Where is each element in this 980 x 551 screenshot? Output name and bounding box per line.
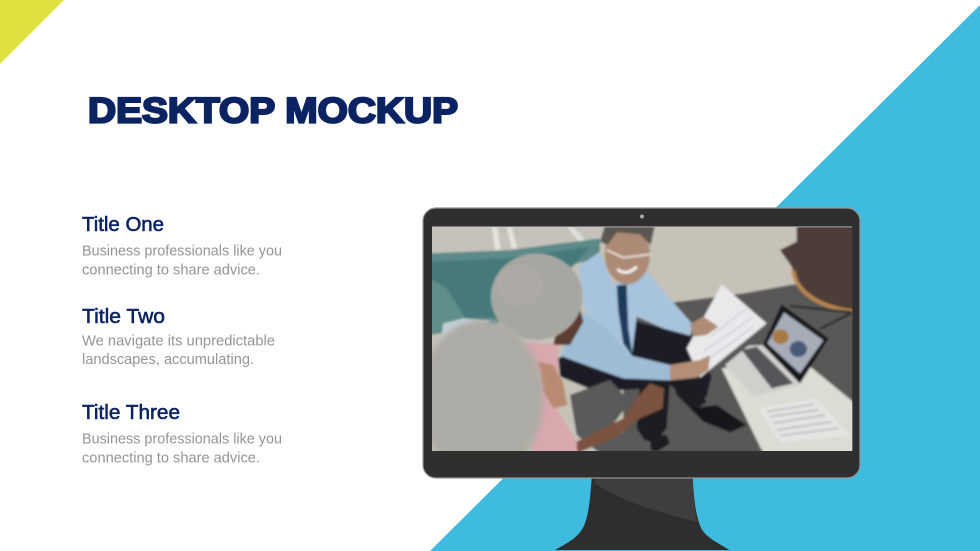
body: title three: Business professionals like you [82, 430, 282, 448]
body: title two [82, 332, 275, 368]
desktop monitor mockup [420, 208, 860, 550]
text block: title three [82, 402, 282, 466]
body: title one: connecting to share advice. [82, 262, 260, 278]
heading: title three: Title Three [82, 402, 180, 424]
body: title one [82, 242, 282, 278]
webcam [640, 214, 644, 218]
text block: title two [82, 306, 275, 368]
heading: title two: Title Two [82, 306, 165, 328]
blue diagonal background [430, 5, 980, 551]
body: title three: connecting to share advice. [82, 450, 260, 466]
monitor body [423, 208, 860, 478]
title: DESKTOP MOCKUP [88, 90, 458, 130]
monitor stand [555, 478, 729, 550]
screen top highlight [432, 226, 852, 228]
body: title two: We navigate its unpredictable [82, 332, 275, 350]
text block: title one [82, 214, 282, 278]
body: title three [82, 430, 282, 466]
yellow corner triangle [0, 0, 64, 64]
body: title one: Business professionals like you [82, 242, 282, 260]
screen photo: advisor with clients [432, 226, 852, 451]
heading: title one: Title One [82, 214, 164, 236]
body: title two: landscapes, accumulating. [82, 351, 254, 368]
